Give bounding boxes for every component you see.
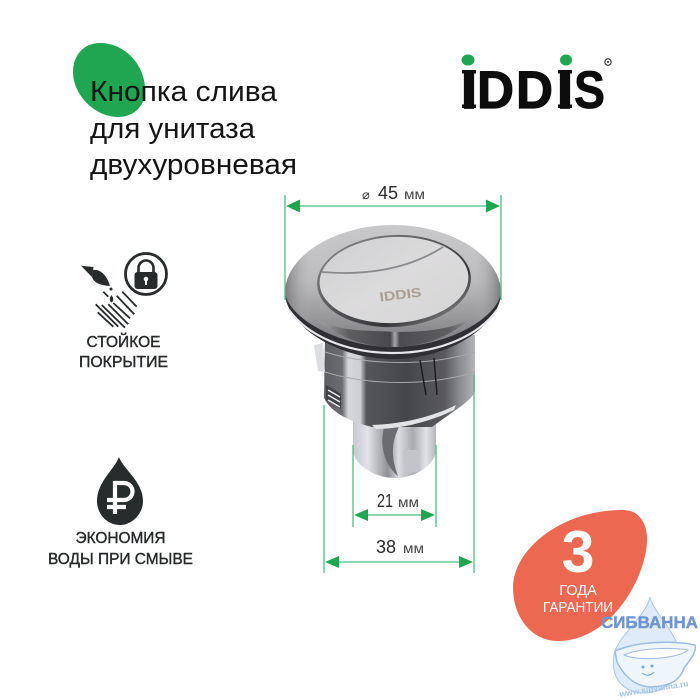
icon: water drop with ruble — [97, 457, 143, 525]
dimension: 45 mm diameter — [285, 183, 501, 300]
dimension: 45 mm diameter: 45 — [378, 183, 398, 203]
brand logo: IDDIS: S — [574, 61, 605, 120]
watermark: Sibvanna: www.sibvanna.ru — [618, 678, 689, 699]
brand logo: IDDIS: D — [516, 61, 553, 120]
product photo: flush button — [285, 225, 501, 478]
label: durable coating: ПОКРЫТИЕ — [79, 354, 168, 371]
warranty badge — [513, 510, 647, 641]
button brand mark: IDDIS — [379, 284, 423, 305]
label: water saving: ЭКОНОМИЯ — [76, 530, 166, 547]
warranty badge: ГАРАНТИИ — [543, 600, 613, 616]
watermark: Sibvanna: СИБВАННА — [601, 614, 698, 632]
brand logo: IDDIS — [461, 54, 611, 120]
dimension: 38 mm body: мм — [403, 540, 424, 556]
dual split line — [322, 247, 443, 273]
brand logo: IDDIS: D — [477, 61, 514, 120]
green accent blob — [73, 43, 145, 117]
flange top — [285, 225, 501, 347]
title — [90, 76, 297, 181]
dimension: 45 mm diameter: мм — [404, 186, 425, 202]
dimension: 21 mm neck: мм — [398, 494, 419, 510]
dimension: 45 mm diameter: ⌀ — [362, 187, 370, 202]
dimension: 21 mm neck: 21 — [377, 491, 393, 511]
flange rim — [285, 295, 501, 359]
label: water saving — [48, 530, 193, 568]
cylindrical body — [324, 335, 475, 427]
dimension: 21 mm neck — [353, 445, 436, 527]
label: water saving: ВОДЫ ПРИ СМЫВЕ — [48, 551, 193, 568]
title: двухуровневая — [90, 149, 297, 181]
button ring — [315, 231, 473, 331]
neck — [353, 420, 436, 478]
title: Кнопка слива — [90, 76, 278, 108]
brand logo: IDDIS: I — [557, 61, 573, 120]
label: durable coating — [79, 332, 168, 371]
dimension: 38 mm body: 38 — [376, 537, 396, 557]
warranty badge: 3 — [562, 519, 594, 585]
button cap — [317, 233, 471, 327]
watermark: Sibvanna — [601, 597, 698, 699]
title: для унитаза — [90, 113, 256, 145]
warranty badge: ГОДА — [559, 583, 597, 599]
brand logo: IDDIS: I — [461, 61, 477, 120]
icon: paint brush and padlock — [81, 254, 166, 328]
label: durable coating: СТОЙКОЕ — [86, 332, 160, 351]
side clip — [314, 343, 325, 372]
dimension: 38 mm body — [324, 375, 474, 573]
dark reflection on flange — [318, 318, 472, 347]
